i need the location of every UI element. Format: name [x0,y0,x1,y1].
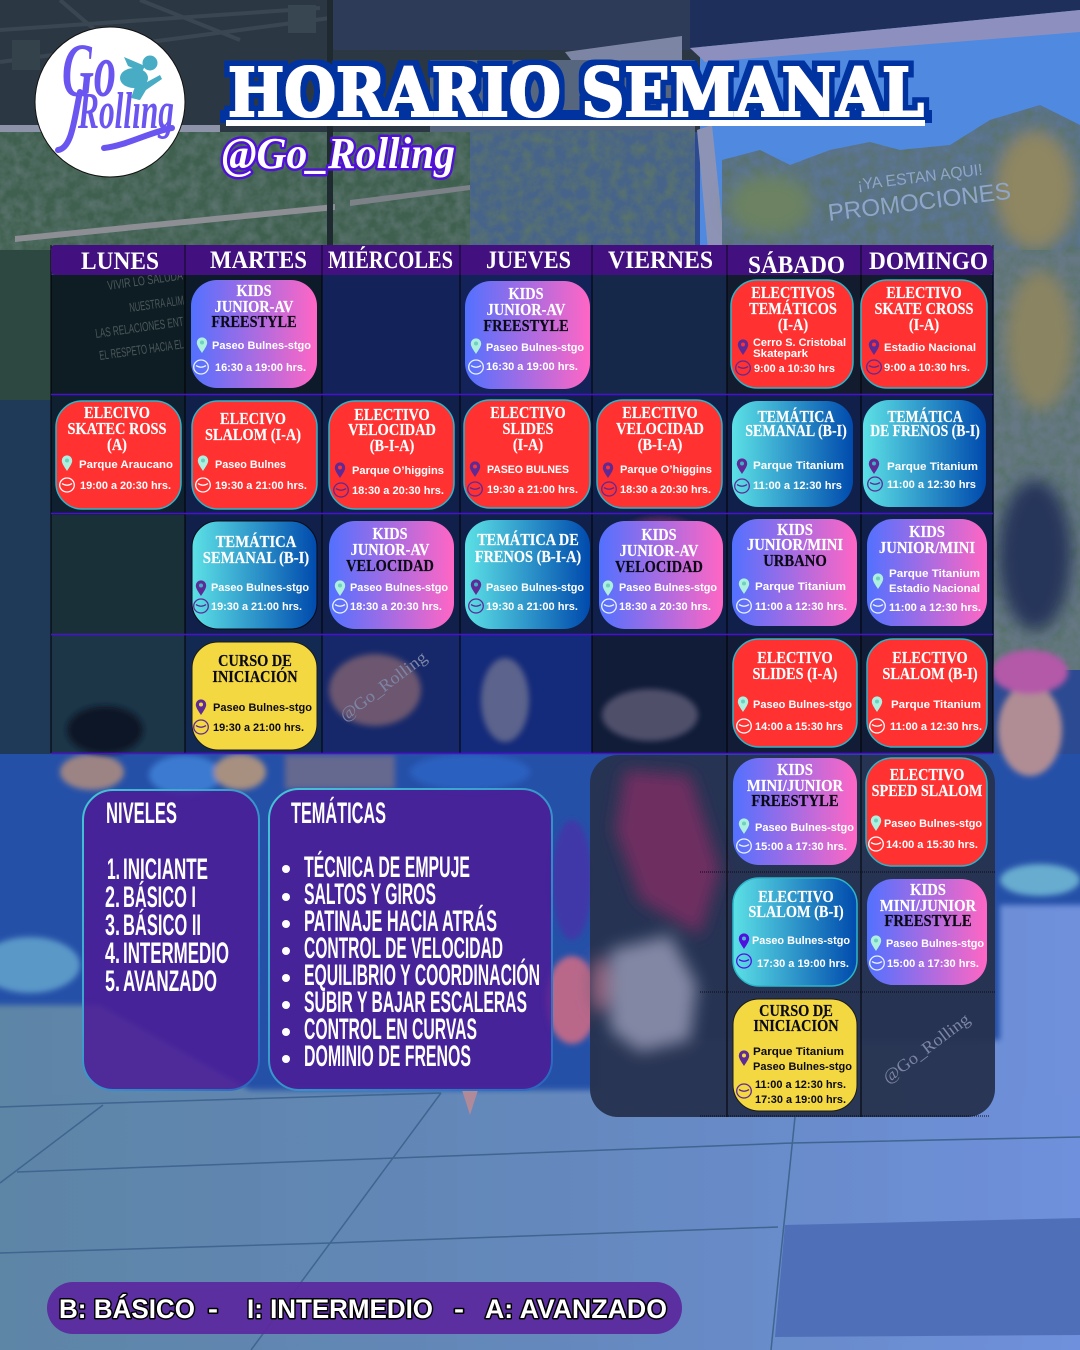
card: sabado curso de iniciacion: 11:00 a 12:30 hrs. [755,1079,846,1091]
card: viernes electivo velocidad: Parque O’higgins [620,464,712,476]
panel: tematicas: DOMINIO DE FRENOS [304,1040,471,1073]
card: jueves electivo slides: SLIDES [502,420,554,438]
card: sabado curso de iniciacion: 17:30 a 19:00 hrs. [755,1094,846,1106]
card: sabado electivo slides: ELECTIVO [757,649,833,667]
card: sabado kids urbano: 11:00 a 12:30 hrs. [755,601,847,613]
background sign text: ¡YA ESTAN AQUI! [856,162,984,194]
card: domingo electivo skate cross: ELECTIVO [886,284,962,302]
card: martes kids freestyle [191,280,317,388]
card: lunes elecivo skatec ross: ELECIVO [84,404,150,422]
card: sabado kids urbano: Parque Titanium [755,581,846,593]
card: sabado tematica semanal: TEMÁTICA [757,408,835,426]
card: domingo electivo slalom [867,639,987,747]
card: viernes electivo velocidad: 18:30 a 20:30 hrs. [620,484,711,496]
card: domingo tematica de frenos [863,400,986,507]
card: domingo kids junior mini: JUNIOR/MINI [879,539,975,557]
table header: LUNES [81,248,159,275]
panel: tematicas: SUBIR Y BAJAR ESCALERAS [304,986,527,1019]
card: domingo electivo slalom: Parque Titanium [891,699,981,711]
card: martes elecivo slalom: Paseo Bulnes [215,459,286,471]
panel: tematicas: EQUILIBRIO Y COORDINACIÓN [304,958,540,992]
card: domingo kids junior mini: Parque Titanium [889,568,980,580]
card: jueves electivo slides [464,400,590,508]
card: sabado kids mini junior freestyle: 15:00 a 17:30 hrs. [755,841,847,853]
card: lunes elecivo skatec ross: (A) [107,436,127,454]
logo skater [120,56,162,100]
card: viernes electivo velocidad: ELECTIVO [622,404,698,422]
card: miercoles electivo velocidad [329,401,454,509]
card: sabado curso de iniciacion: CURSO DE [759,1002,833,1020]
card: martes tematica semanal: 19:30 a 21:00 hrs. [211,601,302,613]
panel: tematicas: SALTOS Y GIROS [304,878,436,911]
card: miercoles electivo velocidad: Parque O’higgins [352,465,444,477]
card: domingo electivo skate cross: Estadio Nacional [884,342,976,354]
card: sabado electivos tematicos: Cerro S. Cristobal [753,337,846,349]
card: miercoles kids velocidad: 18:30 a 20:30 hrs. [350,601,442,613]
card: domingo kids mini junior freestyle: Paseo Bulnes-stgo [886,938,984,950]
handle: @Go_Rolling [222,129,455,178]
legend bar: - [208,1294,218,1324]
card: jueves electivo slides: (I-A) [513,436,543,454]
card: viernes kids velocidad: 18:30 a 20:30 hrs. [619,601,711,613]
card: domingo tematica de frenos: TEMÁTICA [887,408,963,426]
legend bar: A: AVANZADO [485,1294,667,1324]
card: sabado electivos tematicos: ELECTIVOS [751,284,835,302]
wall text: LAS RELACIONES ENT [94,314,185,341]
card: miercoles electivo velocidad: ELECTIVO [354,406,430,424]
panel: tematicas [269,789,552,1090]
card: sabado electivo slides: Paseo Bulnes-stgo [753,699,852,711]
card: sabado electivo slalom: ELECTIVO [758,888,834,906]
card: sabado curso de iniciacion: Parque Titanium [753,1046,844,1058]
table header: VIERNES [608,247,713,274]
card: jueves kids freestyle: FREESTYLE [483,317,569,335]
card: viernes kids velocidad: KIDS [641,526,677,544]
card: sabado kids mini junior freestyle [733,758,857,865]
card: martes kids freestyle: FREESTYLE [211,313,297,331]
card: domingo kids mini junior freestyle [867,879,987,985]
card: sabado tematica semanal: Parque Titanium [753,460,844,472]
card: domingo kids mini junior freestyle: FREESTYLE [884,912,972,930]
wall text: VIVIR LO SALUDA [106,268,184,293]
card: martes elecivo slalom: 19:30 a 21:00 hrs. [215,480,307,492]
card: domingo electivo speed slalom [866,758,987,866]
card: martes curso de iniciacion: INICIACIÓN [212,668,298,686]
card: miercoles kids velocidad: VELOCIDAD [346,557,434,575]
card: sabado kids mini junior freestyle: FREESTYLE [751,792,839,810]
card: domingo kids mini junior freestyle: KIDS [910,881,946,899]
card: domingo kids junior mini: KIDS [909,523,945,541]
card: domingo kids mini junior freestyle: 15:00 a 17:30 hrs. [887,958,979,970]
panel: niveles: 4. [105,937,120,970]
panel: niveles: 3. [105,909,120,942]
panel: tematicas: CONTROL DE VELOCIDAD [304,932,503,965]
panel: niveles: AVANZADO [123,965,217,998]
legend bar: - [454,1294,464,1324]
table header: JUEVES [486,247,571,274]
card: viernes electivo velocidad: VELOCIDAD [616,420,704,438]
panel: tematicas: PATINAJE HACIA ATRÁS [304,904,497,938]
watermark: @Go_Rolling [336,647,431,725]
card: domingo electivo skate cross [861,280,987,388]
card: jueves tematica de frenos: TEMÁTICA DE [477,531,579,549]
legend bar [47,1282,682,1334]
panel: niveles: 1. [107,853,120,886]
card: sabado kids urbano: KIDS [777,521,813,539]
lower photo [0,754,1080,1104]
title: HORARIO SEMANAL [228,53,924,132]
card: viernes electivo velocidad: (B-I-A) [638,436,682,454]
card: martes tematica semanal [192,521,317,629]
card: sabado tematica semanal: 11:00 a 12:30 hrs [753,480,842,492]
card: martes curso de iniciacion: CURSO DE [218,652,292,670]
card: sabado electivos tematicos: TEMÁTICOS [749,300,837,318]
card: sabado electivo slalom: SLALOM (B-I) [748,903,844,921]
table header: MARTES [210,247,307,274]
card: jueves electivo slides: 19:30 a 21:00 hrs. [487,484,578,496]
wall text: NUESTRA ALIM [128,292,185,315]
card: domingo kids junior mini: 11:00 a 12:30 hrs. [889,602,981,614]
card: domingo electivo skate cross: 9:00 a 10:30 hrs. [884,362,970,374]
panel: niveles: NIVELES [106,797,177,830]
card: martes elecivo slalom: SLALOM (I-A) [205,426,301,444]
card: sabado kids urbano [732,519,857,626]
card: domingo electivo slalom: ELECTIVO [892,649,968,667]
panel: niveles [83,790,259,1090]
card: sabado curso de iniciacion [733,999,857,1111]
card: sabado electivo slalom: Paseo Bulnes-stgo [752,935,850,947]
card: domingo kids mini junior freestyle: MINI/JUNIOR [880,897,977,915]
panel: niveles: INTERMEDIO [123,937,229,970]
card: jueves kids freestyle [465,281,590,389]
card: viernes electivo velocidad [597,400,722,508]
card: martes tematica semanal: TEMÁTICA [216,533,297,551]
card: miercoles electivo velocidad: (B-I-A) [370,437,414,455]
panel: niveles: 5. [105,965,120,998]
card: sabado kids mini junior freestyle: KIDS [777,761,813,779]
card: miercoles kids velocidad [329,521,454,629]
card: sabado tematica semanal: SEMANAL (B-I) [745,422,847,440]
card: lunes elecivo skatec ross: SKATEC ROSS [68,420,166,438]
card: sabado electivos tematicos [731,280,853,388]
card: viernes kids velocidad: VELOCIDAD [615,558,703,576]
card: sabado electivos tematicos: Skatepark [753,348,809,360]
card: martes kids freestyle: 16:30 a 19:00 hrs. [215,362,306,374]
wall text [94,268,185,363]
card: martes curso de iniciacion: 19:30 a 21:00 hrs. [213,722,304,734]
panel: niveles: INICIANTE [123,853,208,886]
lower-right table panel [590,755,995,1117]
card: domingo electivo speed slalom: Paseo Bulnes-stgo [884,818,982,830]
card: domingo electivo speed slalom: ELECTIVO [890,766,964,784]
card: sabado kids mini junior freestyle: Paseo Bulnes-stgo [755,822,854,834]
card: sabado electivo slides [733,639,857,747]
panel: tematicas: CONTROL EN CURVAS [304,1013,477,1046]
card: viernes kids velocidad [599,521,723,629]
card: martes tematica semanal: Paseo Bulnes-stgo [211,582,309,594]
panel: tematicas: TÉCNICA DE EMPUJE [304,850,470,884]
card: lunes elecivo skatec ross [56,401,181,509]
card: jueves tematica de frenos: Paseo Bulnes-stgo [486,582,584,594]
panel: niveles: 2. [105,881,120,914]
card: sabado electivos tematicos: (I-A) [778,316,808,334]
card: sabado curso de iniciacion: Paseo Bulnes-stgo [753,1061,852,1073]
card: jueves tematica de frenos: 19:30 a 21:00 hrs. [486,601,578,613]
card: jueves kids freestyle: 16:30 a 19:00 hrs. [486,361,578,373]
card: sabado electivos tematicos: 9:00 a 10:30 hrs [754,363,835,375]
card: miercoles electivo velocidad: 18:30 a 20:30 hrs. [352,485,444,497]
card: martes kids freestyle: JUNIOR-AV [215,298,293,316]
card: martes elecivo slalom: ELECIVO [220,410,286,428]
card: jueves tematica de frenos [465,520,590,629]
legend bar: I: INTERMEDIO [247,1294,433,1324]
card: jueves kids freestyle: KIDS [508,285,544,303]
card: sabado kids urbano: JUNIOR/MINI [747,536,843,554]
card: viernes kids velocidad: Paseo Bulnes-stgo [619,582,717,594]
card: domingo kids junior mini [867,519,987,626]
card: miercoles kids velocidad: KIDS [372,525,408,543]
card: domingo electivo slalom: 11:00 a 12:30 hrs. [890,721,982,733]
card: miercoles kids velocidad: Paseo Bulnes-stgo [350,582,448,594]
wall text: EL RESPETO HACIA EL [98,336,185,363]
card: martes kids freestyle: KIDS [236,282,272,300]
card: sabado electivo slides: SLIDES (I-A) [753,665,837,683]
card: domingo electivo slalom: SLALOM (B-I) [882,665,978,683]
card: sabado electivo slalom: 17:30 a 19:00 hrs. [757,958,849,970]
card: martes tematica semanal: SEMANAL (B-I) [203,549,309,567]
schedule table background [51,245,993,754]
card: domingo electivo skate cross: (I-A) [909,316,939,334]
card: sabado kids urbano: URBANO [763,552,827,570]
legend bar: B: BÁSICO [59,1293,195,1324]
card: sabado electivo slalom [733,878,857,986]
card: domingo electivo speed slalom: 14:00 a 15:30 hrs. [886,839,978,851]
card: domingo tematica de frenos: DE FRENOS (B-I) [870,422,980,440]
card: martes elecivo slalom [192,401,317,509]
card: sabado kids mini junior freestyle: MINI/JUNIOR [747,777,844,795]
card: jueves kids freestyle: Paseo Bulnes-stgo [486,342,584,354]
card: martes curso de iniciacion: Paseo Bulnes-stgo [213,702,312,714]
card: sabado electivo slides: 14:00 a 15:30 hrs [755,721,843,733]
table header: MIÉRCOLES [328,246,453,274]
card: martes kids freestyle: Paseo Bulnes-stgo [212,340,311,352]
watermark: @Go_Rolling [879,1009,974,1087]
card: jueves electivo slides: PASEO BULNES [487,464,569,476]
card: domingo electivo skate cross: SKATE CROSS [875,300,973,318]
card: miercoles electivo velocidad: VELOCIDAD [348,421,436,439]
logo: Go [62,29,116,113]
background sign text: PROMOCIONES [826,178,1012,227]
logo: Rolling [77,83,174,140]
card: sabado curso de iniciacion: INICIACIÓN [753,1017,839,1035]
card: miercoles kids velocidad: JUNIOR-AV [351,541,429,559]
card: viernes kids velocidad: JUNIOR-AV [620,542,698,560]
card: sabado tematica semanal [732,401,853,507]
card: lunes elecivo skatec ross: Parque Araucano [79,459,173,471]
card: domingo kids junior mini: Estadio Nacional [889,583,980,595]
card: domingo electivo speed slalom: SPEED SLALOM [872,782,983,800]
card: jueves kids freestyle: JUNIOR-AV [487,301,565,319]
table header: SÁBADO [748,251,845,279]
card: jueves tematica de frenos: FRENOS (B-I-A) [475,548,581,566]
panel: tematicas: TEMÁTICAS [291,796,386,830]
table header: DOMINGO [869,248,988,275]
card: domingo tematica de frenos: Parque Titanium [887,461,978,473]
card: domingo tematica de frenos: 11:00 a 12:30 hrs [887,479,976,491]
panel: niveles: BÁSICO II [123,908,201,942]
card: martes curso de iniciacion [192,642,317,750]
card: jueves electivo slides: ELECTIVO [490,404,566,422]
logo [35,27,185,177]
card: lunes elecivo skatec ross: 19:00 a 20:30 hrs. [80,480,171,492]
panel: niveles: BÁSICO I [123,880,196,914]
table header [51,245,993,279]
